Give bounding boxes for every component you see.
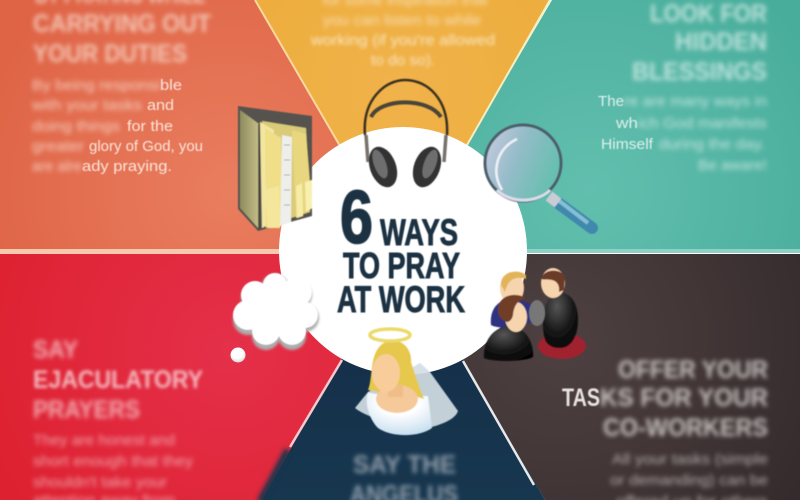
- body text: teal panel: re are many ways in: [624, 93, 767, 110]
- icon: headphones: [364, 80, 447, 191]
- body text: orange panel: By being responsi: [32, 77, 160, 94]
- body text: orange panel: for the: [127, 118, 173, 135]
- body text: teal panel: ich God manifests: [638, 115, 767, 132]
- body text: brown panel: [610, 451, 768, 500]
- heading: say ejaculatory prayers: SAY: [33, 336, 78, 364]
- heading: offer your tasks for your co-workers: KS FOR YOUR: [600, 384, 768, 412]
- title: 6 ways to pray at work: 6: [340, 175, 373, 259]
- title: 6 ways to pray at work: WAYS: [380, 212, 458, 253]
- body text: orange panel: greater: [32, 138, 84, 155]
- heading: say ejaculatory prayers: EJACULATORY: [33, 366, 203, 394]
- icon: angel: [355, 329, 458, 435]
- body text: yellow panel: to do so).: [371, 52, 435, 69]
- panel: teal, look for hidden blessings: [467, 0, 800, 249]
- title: 6 ways to pray at work: TO PRAY: [343, 245, 460, 286]
- body text: teal panel: wh: [615, 115, 638, 132]
- body text: orange panel: ady praying.: [82, 158, 172, 175]
- title: 6 ways to pray at work: AT WORK: [337, 279, 465, 320]
- panel: red, ejaculatory prayers: [0, 254, 345, 500]
- central white circle: [279, 127, 527, 375]
- body text: orange panel: and: [147, 97, 174, 114]
- panel: navy, say the angelus: [262, 358, 545, 500]
- panel: brown, offer your tasks: [462, 254, 800, 500]
- body text: red panel: They are honest and: [33, 432, 175, 449]
- body text: teal panel: Himself: [601, 136, 654, 153]
- heading: offer your tasks for your co-workers: TAS: [562, 384, 600, 412]
- panel: yellow, listen to music: [255, 0, 550, 146]
- body text: red panel: shouldn't take your: [33, 474, 167, 491]
- body text: brown panel: or demanding) can be: [610, 472, 768, 489]
- heading: carrying out your duties: CARRYING OUT: [33, 10, 211, 38]
- body text: orange panel: [31, 77, 203, 175]
- body text: yellow panel: you can listen to while: [323, 12, 481, 29]
- icon: group of people: [484, 268, 586, 361]
- body text: teal panel: Be aware!: [698, 157, 767, 174]
- heading: offer your tasks for your co-workers: CO-WORKERS: [603, 414, 768, 442]
- body text: yellow panel: [310, 0, 495, 69]
- body text: brown panel: All your tasks (simple: [612, 451, 768, 468]
- heading: carrying out your duties: [33, 0, 211, 68]
- heading: say the angelus: SAY THE: [353, 451, 456, 479]
- heading: carrying out your duties: YOUR DUTIES: [33, 40, 187, 68]
- heading: offer your tasks for your co-workers: OFFER YOUR: [618, 356, 768, 384]
- body text: orange panel: ble: [160, 77, 182, 94]
- body text: red panel: [33, 432, 194, 500]
- heading: offer your tasks for your co-workers: [562, 356, 768, 442]
- body text: orange panel: are alre: [32, 158, 82, 175]
- title: 6 ways to pray at work: [337, 175, 465, 320]
- body text: teal panel: during the day.: [659, 136, 765, 153]
- panel: orange, carrying out your duties: [0, 0, 345, 249]
- icon: magnifying glass: [485, 125, 592, 228]
- body text: red panel: short enough that they: [33, 453, 194, 470]
- body text: orange panel: doing things: [32, 118, 120, 135]
- body text: orange panel: glory of God, you: [89, 138, 203, 155]
- heading: look for hidden blessings: LOOK FOR: [650, 0, 767, 28]
- body text: teal panel: [598, 93, 767, 174]
- heading: say ejaculatory prayers: [33, 336, 203, 424]
- heading: say ejaculatory prayers: PRAYERS: [33, 396, 140, 424]
- icon: folder: [238, 106, 312, 231]
- body text: yellow panel: working (if you're allowed: [310, 32, 495, 49]
- icon: thought cloud: [230, 273, 319, 362]
- heading: look for hidden blessings: BLESSINGS: [632, 58, 767, 86]
- heading: look for hidden blessings: [632, 0, 767, 86]
- heading: say the angelus: [350, 451, 458, 500]
- heading: look for hidden blessings: HIDDEN: [675, 28, 767, 56]
- body text: orange panel: with your tasks: [31, 97, 142, 114]
- body text: teal panel: The: [598, 93, 624, 110]
